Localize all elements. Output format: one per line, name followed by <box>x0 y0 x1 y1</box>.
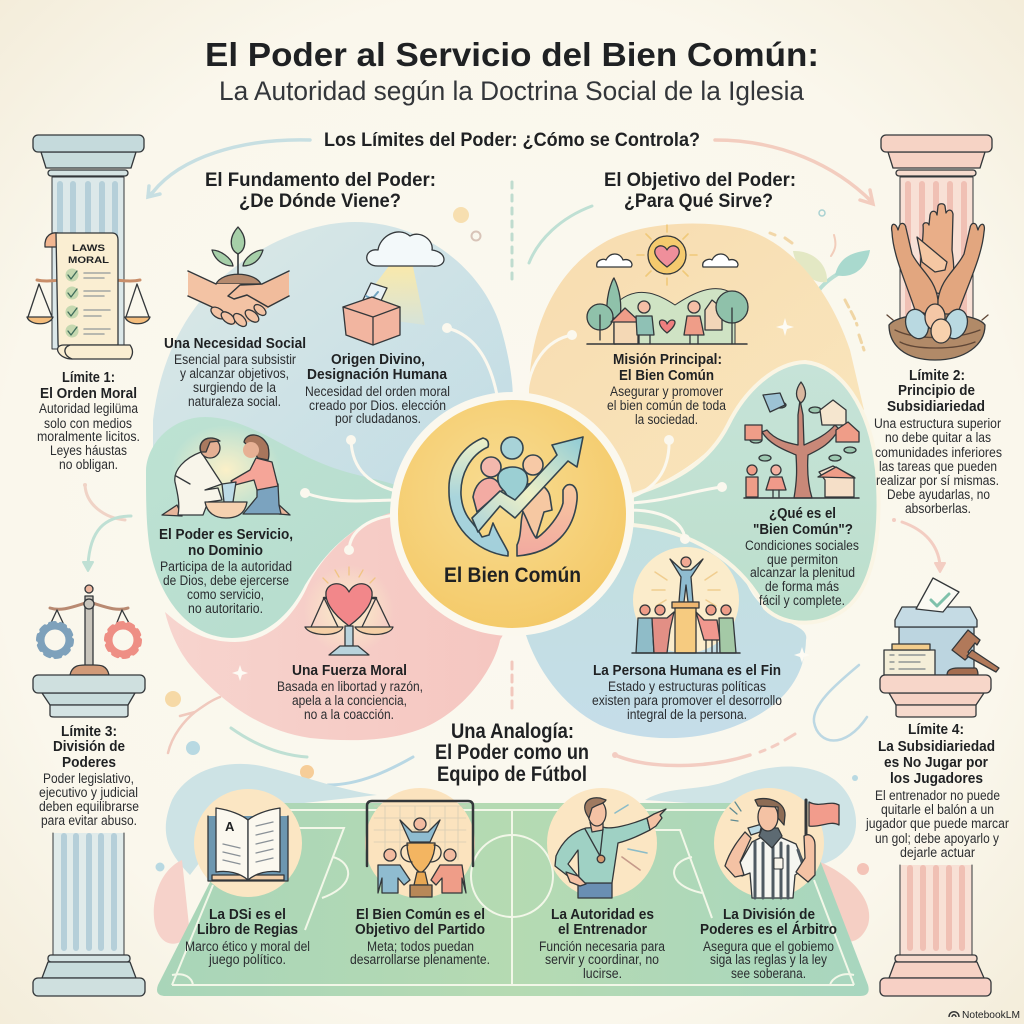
text: origen divino: Designación Humana <box>307 367 448 383</box>
field lines <box>172 810 854 985</box>
blob: left blue <box>166 764 377 875</box>
text: entrenador: Función necesaria para <box>539 939 665 954</box>
icon: scales and moral law scroll <box>27 233 150 359</box>
text: libro de reglas: Marco ético y moral del <box>185 939 310 954</box>
text: objetivo del partido: El Bien Común es el <box>356 907 485 923</box>
heading: foundation: El Fundamento del Poder: <box>205 170 436 191</box>
heading: objective: El Objetivo del Poder: <box>604 170 796 191</box>
text: limit 4 <box>865 722 1009 860</box>
text: libro de reglas: Libro de Regias <box>197 922 298 938</box>
text: limit 3 <box>39 724 139 828</box>
heading: analogy <box>435 719 589 786</box>
text: limit 4: quitarle el balón a un <box>881 802 994 817</box>
icon: referee <box>725 799 839 898</box>
text: misión principal: Misión Principal: <box>613 352 722 368</box>
label: El Bien Común: El Bien Común <box>444 564 581 587</box>
heading: analogy: Equipo de Fútbol <box>437 762 587 786</box>
text: limit 4: El entrenador no puede <box>875 788 1000 803</box>
blob: left pink <box>154 860 190 944</box>
text: origen divino: por cludadanos. <box>335 411 421 426</box>
text: limit 4: es No Jugar por <box>884 755 988 771</box>
text: limit 4: dejarle actuar <box>900 845 975 860</box>
text: libro de reglas: juego político. <box>208 952 286 967</box>
scroll text <box>68 243 109 266</box>
text: una necesidad social: y alcanzar objetivos, <box>180 366 289 381</box>
text: árbitro: Poderes es el Árbitro <box>700 921 837 938</box>
text: limit 2: Principio de <box>898 383 975 399</box>
text: qué es el bien común: alcanzar la plenitud <box>750 565 855 580</box>
text: árbitro: see soberana. <box>731 966 806 981</box>
icon: coach <box>555 798 666 898</box>
text: misión principal: la sociedad. <box>635 412 698 427</box>
connector lines <box>300 323 727 555</box>
text: qué es el bien común <box>745 506 859 608</box>
heading: objective <box>604 170 796 212</box>
text: origen divino: Necesidad del orden moral <box>305 384 450 399</box>
column: limit 4 <box>880 865 991 996</box>
text: limit 4: jugador que puede marcar <box>865 816 1009 831</box>
text: entrenador: lucirse. <box>583 966 622 981</box>
blob: teal <box>632 362 879 623</box>
text: limit 2 <box>874 368 1002 516</box>
blob: blue <box>525 505 806 738</box>
text: limit 3: División de <box>53 739 125 755</box>
text: misión principal: el bien común de toda <box>607 398 726 413</box>
text: persona humana: Estado y estructuras políticas <box>608 679 766 694</box>
text: limit 1: no obligan. <box>59 457 118 472</box>
text: misión principal: El Bien Común <box>619 368 714 384</box>
text: limit 2: no debe quitar a las <box>885 430 991 445</box>
text: poder es servicio: El Poder es Servicio, <box>159 527 293 543</box>
blob: yellow <box>529 223 864 510</box>
text: limit 4: los Jugadores <box>890 771 983 787</box>
blob: blue <box>153 222 513 525</box>
text: limit 2: Subsidiariedad <box>887 399 985 415</box>
column: limit 3 <box>33 833 145 996</box>
text: limit 3: deben equilibrarse <box>39 799 139 814</box>
text: entrenador: servir y coordinar, no <box>545 952 659 967</box>
heading: analogy: Una Analogía: <box>451 719 574 743</box>
heading: objective: ¿Para Qué Sirve? <box>624 191 773 212</box>
text: poder es servicio: no autoritario. <box>188 601 263 616</box>
text: limit 2: Una estructura superior <box>874 416 1001 431</box>
column: limit 4 capital <box>880 675 991 717</box>
text: limit 2: Debe ayudarlas, no <box>887 487 990 502</box>
panel: foundation blobs <box>146 222 513 740</box>
text: fuerza moral: Basada en libortad y razón, <box>277 679 423 694</box>
text: objetivo del partido <box>350 907 490 967</box>
icon: washing feet <box>162 425 290 518</box>
text: poder es servicio <box>159 527 293 616</box>
discs <box>194 789 302 897</box>
text: fuerza moral: no a la coacción. <box>304 707 394 722</box>
text: persona humana: La Persona Humana es el Fin <box>593 663 781 679</box>
text: qué es el bien común: que permiton <box>767 552 838 567</box>
text: qué es el bien común: "Bien Común"? <box>753 522 853 538</box>
text: árbitro: Asegura que el gobiemo <box>703 939 834 954</box>
text: fuerza moral: apela a la conciencia, <box>292 693 407 708</box>
text: limit 3: ejecutivo y judicial <box>39 785 138 800</box>
scroll text: LAWS <box>72 243 105 254</box>
icon: people and arrow <box>449 437 583 556</box>
icon: scales with gears <box>38 585 140 675</box>
text: entrenador <box>539 907 665 981</box>
text: origen divino <box>305 352 450 426</box>
arrow: to limit 2 <box>715 140 873 204</box>
icon: handshake and plant <box>188 227 289 329</box>
text: limit 2: Límite 2: <box>909 368 965 384</box>
text: poder es servicio: de Dios, debe ejercerse <box>163 573 289 588</box>
decorative sprout <box>793 250 870 327</box>
column: limit 3 capital <box>33 675 145 717</box>
text: limit 4: Límite 4: <box>908 722 964 738</box>
text: origen divino: Origen Divino, <box>331 352 425 368</box>
icon: cloud and ballot box <box>343 232 444 345</box>
text: libro de reglas <box>185 907 310 967</box>
text: una necesidad social: surgiendo de la <box>193 380 276 395</box>
text: una necesidad social: Una Necesidad Social <box>164 336 306 352</box>
icon: hands and nest <box>887 204 988 360</box>
heading: analogy: El Poder como un <box>435 740 589 764</box>
heading: limits of power: Los Límites del Poder: ¿Cómo se Controla? <box>324 130 700 151</box>
text: poder es servicio: Participa de la autoridad <box>160 559 292 574</box>
heading: foundation <box>205 170 436 212</box>
text: misión principal: Asegurar y promover <box>610 384 723 399</box>
center circle: El Bien Común <box>390 392 634 636</box>
text: limit 1: solo con medios <box>44 416 132 431</box>
text: limit 1: Límite 1: <box>62 370 115 386</box>
panel: objective blobs <box>525 223 879 738</box>
text: entrenador: La Autoridad es <box>551 907 654 923</box>
text: árbitro: La División de <box>723 907 815 923</box>
disc: person backdrop <box>633 547 739 653</box>
text: qué es el bien común: de forma más <box>765 579 839 594</box>
panel: soccer analogy <box>154 764 869 996</box>
arrowhead: limit 4 <box>935 563 945 572</box>
icon: heart scale <box>304 565 394 655</box>
text: limit 2: las tareas que pueden <box>879 459 997 474</box>
sparkles <box>232 318 810 681</box>
text: poder es servicio: no Dominio <box>188 543 263 559</box>
text: qué es el bien común: ¿Qué es el <box>769 506 836 522</box>
text: persona humana: integral de la persona. <box>627 707 747 722</box>
blob: right pink <box>820 862 869 942</box>
arrow: to limit 1 <box>148 140 310 197</box>
text: limit 3: Poderes <box>62 755 116 771</box>
text: qué es el bien común: Condiciones sociales <box>745 538 859 553</box>
text: limit 2: realizar por sí mismas. <box>876 473 999 488</box>
icon: sun and village <box>587 225 748 344</box>
title: El Poder al Servicio del Bien Común: <box>205 36 819 73</box>
text: una necesidad social: naturaleza social. <box>188 394 281 409</box>
text: limit 1: moralmente licitos. <box>37 429 140 444</box>
text: limit 3: para evitar abuso. <box>41 813 137 828</box>
text: limit 2: absorberlas. <box>905 501 971 516</box>
letter on book: A <box>225 819 235 834</box>
text: limit 3: Límite 3: <box>61 724 117 740</box>
text: qué es el bien común: fácil y complete. <box>759 593 845 608</box>
text: árbitro: siga las reglas y la ley <box>710 952 827 967</box>
blob: green <box>146 417 410 638</box>
text: origen divino: creado por Dios. elección <box>309 398 446 413</box>
text: fuerza moral <box>277 663 423 722</box>
text: libro de reglas: La DSi es el <box>209 907 286 923</box>
icon: ballot box, gavel, documents <box>884 578 999 675</box>
text: limit 1: El Orden Moral <box>40 386 137 402</box>
icon: goal and trophy <box>367 801 473 897</box>
text: árbitro <box>700 907 837 981</box>
text: misión principal <box>607 352 726 427</box>
text: objetivo del partido: desarrollarse plenamente. <box>350 952 490 967</box>
text: limit 1: Leyes háustas <box>50 443 127 458</box>
text: poder es servicio: como servicio, <box>187 587 264 602</box>
blob: pink <box>165 508 512 740</box>
icon: common good tree <box>744 382 859 498</box>
logo: NotebookLM: NotebookLM <box>962 1009 1020 1021</box>
icon: rule book <box>208 808 288 881</box>
arrowhead: limit 3 <box>83 562 93 571</box>
column: limit 2 <box>881 135 992 322</box>
text: limit 1: Autoridad legilüma <box>39 401 138 416</box>
text: objetivo del partido: Objetivo del Partido <box>355 922 485 938</box>
column: limit 1 <box>33 135 144 349</box>
text: limit 4: La Subsidiariedad <box>878 739 995 755</box>
decorative curves <box>83 182 940 875</box>
subtitle: La Autoridad según la Doctrina Social de la Iglesia <box>219 76 805 106</box>
text: persona humana: existen para promover el desorrollo <box>592 693 782 708</box>
icon: person on podium <box>632 557 740 653</box>
text: una necesidad social: Esencial para subsistir <box>174 352 296 367</box>
scroll text: MORAL <box>68 255 109 266</box>
text: limit 2: comunidades inferiores <box>875 445 1002 460</box>
text: limit 3: Poder legislativo, <box>43 771 134 786</box>
blob: right blue <box>645 766 856 865</box>
text: una necesidad social <box>164 336 306 409</box>
text: objetivo del partido: Meta; todos puedan <box>367 939 474 954</box>
text: limit 4: un gol; debe apoyarlo y <box>875 831 999 846</box>
heading: foundation: ¿De Dónde Viene? <box>239 191 401 212</box>
field <box>157 803 869 996</box>
text: entrenador: el Entrenador <box>558 922 647 938</box>
text: fuerza moral: Una Fuerza Moral <box>292 663 407 679</box>
text: limit 1 <box>37 370 140 472</box>
text: persona humana <box>592 663 782 722</box>
